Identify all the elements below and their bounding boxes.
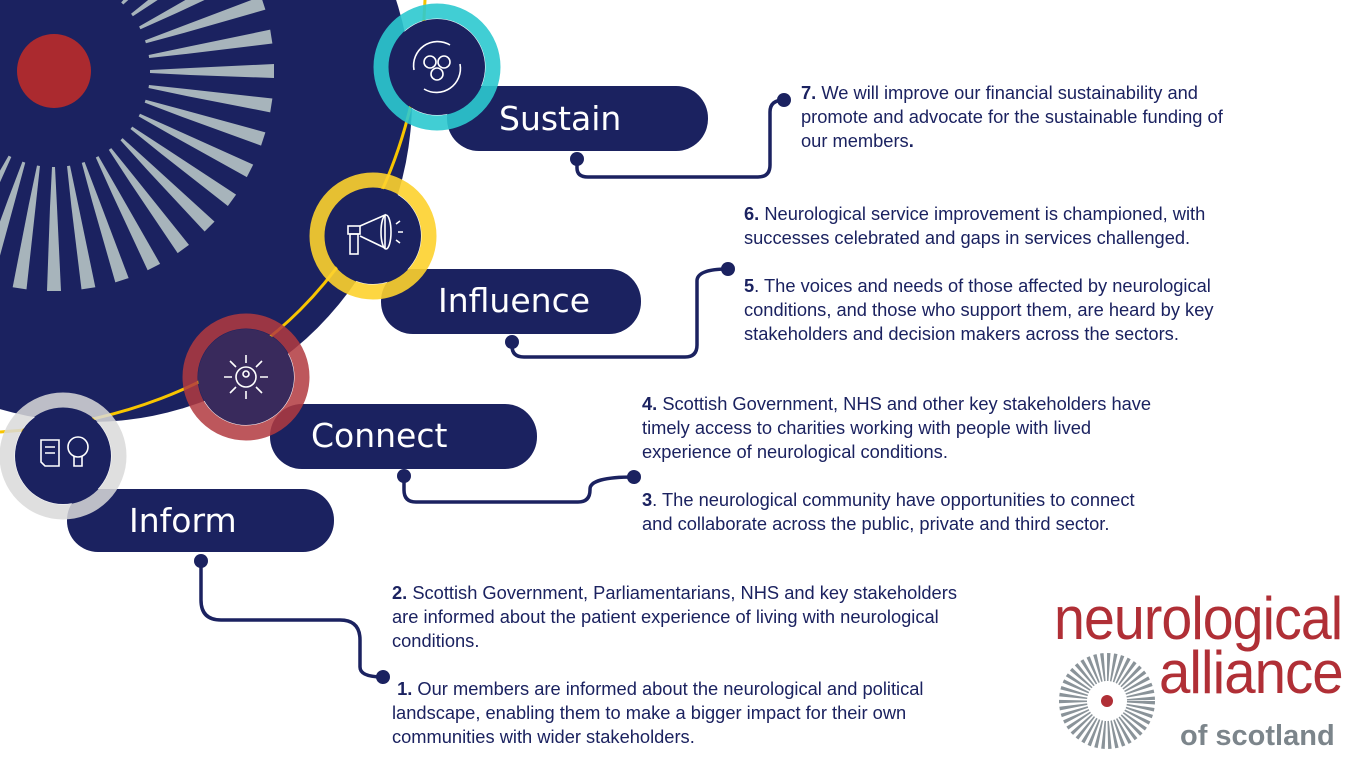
text: objectives 6 and 5: 6. Neurological service improvement is championed, with — [744, 203, 1205, 224]
text: objective 2: 2. Scottish Government, Parliamentarians, NHS and key stakeholders — [392, 582, 957, 603]
text: objective 1 — [392, 678, 923, 747]
text: objective 1: 1. Our members are informed about the neurological and political — [397, 678, 923, 699]
text: Influence — [438, 281, 590, 320]
pill labels: Sustain — [499, 99, 621, 138]
text: objective 7: our members. — [801, 130, 914, 151]
text: objectives 6 and 5: successes celebrated and gaps in services challenged. — [744, 227, 1190, 248]
logo: of scotland — [1180, 720, 1335, 752]
text: objective 2: are informed about the patient experience of living with neurological — [392, 606, 939, 627]
pills — [67, 86, 708, 552]
text: Connect — [311, 416, 447, 455]
text: objectives 4 and 3 — [642, 393, 1151, 534]
logo: alliance — [1159, 639, 1343, 706]
sunburst — [0, 0, 274, 291]
icon glyphs — [41, 42, 460, 466]
text: objective 2 — [392, 582, 957, 651]
text: objective 7 — [801, 82, 1223, 151]
text: objectives 6 and 5: stakeholders and decision makers across the sectors. — [744, 323, 1179, 344]
logo: neurological — [1054, 585, 1342, 652]
text: objective 1: communities with wider stakeholders. — [392, 726, 695, 747]
navy quarter circle — [0, 0, 412, 422]
text: objectives 4 and 3: timely access to charities working with people with lived — [642, 417, 1091, 438]
icon circles — [7, 11, 493, 512]
text: objectives 4 and 3: and collaborate across the public, private and third sector. — [642, 513, 1109, 534]
connectors — [201, 100, 784, 677]
text: objectives 6 and 5 — [744, 203, 1214, 344]
text: objectives 4 and 3: 4. Scottish Government, NHS and other key stakeholders have — [642, 393, 1151, 414]
yellow arc line — [0, 0, 425, 432]
text: objective 2: conditions. — [392, 630, 479, 651]
text: objectives 4 and 3: experience of neurological conditions. — [642, 441, 948, 462]
text: Inform — [129, 501, 237, 540]
text: objectives 6 and 5: 5. The voices and needs of those affected by neurological — [744, 275, 1211, 296]
logo — [1054, 585, 1343, 752]
text: objective 7: promote and advocate for the sustainable funding of — [801, 106, 1223, 127]
text: objective 7: 7. We will improve our financial sustainability and — [801, 82, 1198, 103]
text: objectives 4 and 3: 3. The neurological community have opportunities to connect — [642, 489, 1135, 510]
text: objective 1: landscape, enabling them to make a bigger impact for their own — [392, 702, 906, 723]
text: objectives 6 and 5: conditions, and those who support them, are heard by key — [744, 299, 1214, 320]
